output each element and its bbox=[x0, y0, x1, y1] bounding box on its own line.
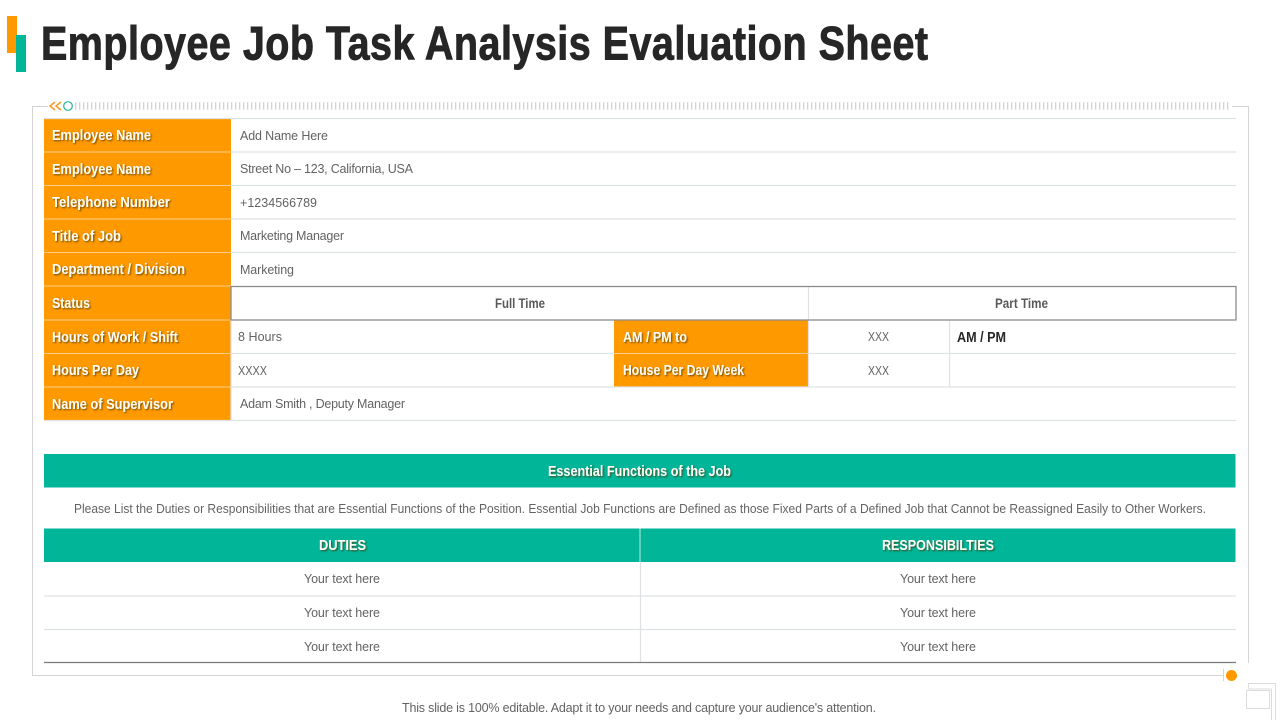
row labels: House Per Day Week bbox=[623, 363, 745, 379]
table header bbox=[44, 528, 1236, 562]
row labels bbox=[52, 128, 745, 413]
icon: corner logo mark bbox=[1246, 684, 1276, 720]
row values: Add Name Here bbox=[240, 129, 328, 143]
row values: XXX bbox=[868, 330, 890, 344]
row values: XXXX bbox=[238, 364, 268, 378]
row labels: Department / Division bbox=[52, 262, 185, 278]
heading: essential functions banner bbox=[44, 454, 1236, 488]
row labels: AM / PM to bbox=[623, 330, 687, 346]
panel: duties and responsibilities table bbox=[44, 528, 1236, 662]
status options: Full Time bbox=[495, 295, 545, 311]
row labels: Hours of Work / Shift bbox=[52, 330, 178, 346]
table cells: Your text here bbox=[900, 572, 976, 586]
table header: RESPONSIBILTIES bbox=[882, 538, 994, 554]
row labels: Status bbox=[52, 296, 90, 312]
row values bbox=[238, 129, 890, 411]
row labels: Telephone Number bbox=[52, 195, 170, 211]
icon: title accent bars bbox=[7, 16, 26, 72]
table header: DUTIES bbox=[319, 538, 366, 554]
orange label column bbox=[44, 118, 808, 420]
row labels: Name of Supervisor bbox=[52, 397, 173, 413]
row values: 8 Hours bbox=[238, 330, 282, 344]
row values: Street No – 123, California, USA bbox=[240, 162, 414, 176]
heading: essential functions banner: Essential Functions of the Job bbox=[548, 464, 731, 480]
row values: XXX bbox=[868, 364, 890, 378]
table cells: Your text here bbox=[900, 606, 976, 620]
row labels: Employee Name bbox=[52, 128, 151, 144]
AM / PM value: AM / PM bbox=[957, 330, 1006, 346]
table cells bbox=[304, 572, 976, 654]
row labels: Hours Per Day bbox=[52, 363, 139, 379]
table cells: Your text here bbox=[900, 640, 976, 654]
status options: Part Time bbox=[995, 295, 1048, 311]
row values: Marketing bbox=[240, 263, 294, 277]
table grid bbox=[44, 562, 1236, 662]
row values: Marketing Manager bbox=[240, 229, 344, 243]
panel: frame bbox=[32, 102, 1248, 681]
row labels: Employee Name bbox=[52, 162, 151, 178]
row values: Adam Smith , Deputy Manager bbox=[240, 397, 405, 411]
text block: instructions: Please List the Duties or Responsibilities that are Essential Functions of the Position. Essential Job Functions are Defined as those Fixed Parts of a Defined Job that Cannot be Reassigned Easily to Other Workers. bbox=[74, 502, 1206, 516]
table cells: Your text here bbox=[304, 606, 380, 620]
title: Employee Job Task Analysis Evaluation Sheet bbox=[41, 18, 928, 70]
status options bbox=[495, 295, 1048, 311]
panel: employee details table bbox=[44, 118, 1236, 420]
table cells: Your text here bbox=[304, 640, 380, 654]
footer note: This slide is 100% editable. Adapt it to your needs and capture your audience's attention. bbox=[402, 701, 876, 715]
row labels: Title of Job bbox=[52, 229, 121, 245]
row values: +1234566789 bbox=[240, 196, 317, 210]
light separators in label column bbox=[44, 152, 808, 387]
status row outline bbox=[231, 286, 1236, 320]
row grid lines bbox=[44, 118, 1236, 420]
table cells: Your text here bbox=[304, 572, 380, 586]
